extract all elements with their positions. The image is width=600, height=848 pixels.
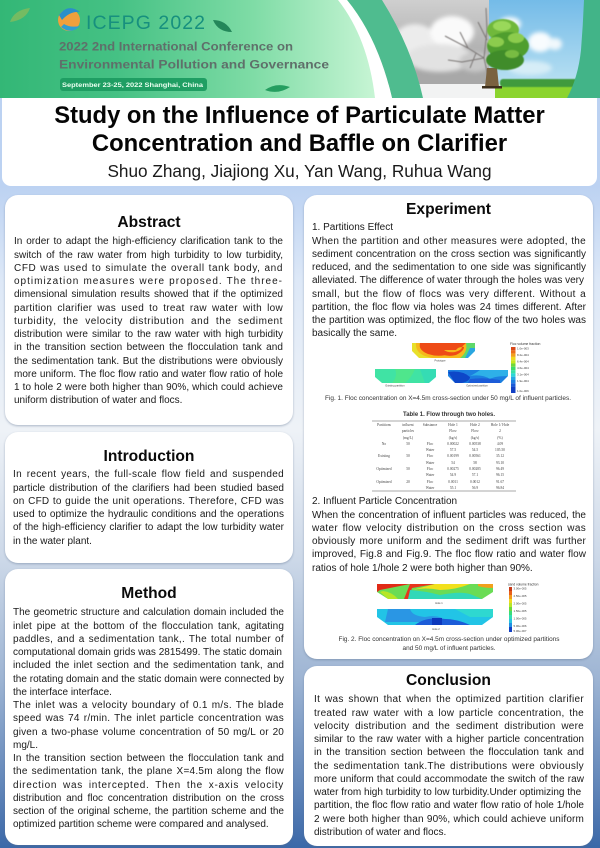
panel: method [5,569,293,845]
conference full title line 2: Environmental Pollution and Governance [59,58,329,72]
panel: conclusion [304,666,593,846]
text: method body [13,607,284,830]
contour labels: Hole 2 [432,627,440,631]
text: method body: included the inlet section and the sedimentation tank, and [13,660,284,671]
text: abstract body: turbidity, the velocity distribution and the sediment [14,316,283,327]
table 1 title: Table 1. Flow through two holes. [403,411,495,418]
table 1: 54.9 [450,473,456,477]
text: conclusion body: 2 were both higher than 90%, which could achieve uniform [314,814,584,825]
arc bands [338,0,600,98]
table 1: Floc [427,480,434,484]
text: method body: In the transition section between the flocculation tank and [13,753,284,764]
banner background [0,0,600,98]
text: method body: computational domain grids was 2815499. The static domain [13,647,282,658]
authors: Shuo Zhang, Jiajiong Xu, Yan Wang, Ruhua Wang [107,161,492,181]
table 1: Existing [378,454,390,458]
table 1: Hole 1/ Hole [491,423,510,427]
figure 1: floc concentration contours [375,342,540,393]
table 1: 55.1 [450,486,456,490]
text: introduction body: in the water plant. [13,536,92,547]
text: conclusion body: similar to the raw water with a higher particle concentration [314,734,584,745]
text: abstract body: In order to adapt the high-efficiency clarification tank to the [14,236,283,247]
colour legend [510,342,540,393]
text: influent particle concentration: When the concentration of influent particles was reduced, the [312,510,586,521]
text: conclusion body: water from high turbidity to low turbidity.Under optimizing the [314,787,581,798]
conference logo [58,8,80,31]
colour legend: 3.00e-005 [514,586,527,590]
text: abstract body: in the transition section between the flocculation tank and [14,342,283,353]
text: partitions effect: When the partition and other measures were adopted, the [312,236,586,247]
date pill [60,78,207,91]
contour labels: Prototype [434,358,446,362]
table 1: (kg/s) [471,436,480,440]
table 1: 35.12 [496,454,504,458]
text: conclusion body: It was shown that when the optimized partition clarifier [314,694,584,705]
contour labels: Optimized partition [466,384,488,388]
text: partitions effect: alleviated. The difference of water through the holes was very [312,275,584,286]
table 1: particles [402,429,415,433]
colour legend: Floc volume fraction [510,342,540,346]
table 1: 0.0011 [448,480,458,484]
colour legend: 1.0e-006 [517,389,529,393]
text: abstract body: CFD was used to simulate the overall tank body, and [14,263,283,274]
title: Study on the Influence of Particulate Matter [54,102,545,129]
text: partitions effect [312,222,586,339]
table 1: 4.09 [497,442,503,446]
table 1: 96.84 [496,486,504,490]
contour: existing partition [375,369,436,383]
text: method body: The inlet was a velocity boundary of 0.1 m/s. The blade [13,700,284,711]
table 1: Hole 2 [470,423,480,427]
text: partitions effect: sediment concentration on the cross section was significantly [312,249,586,260]
heading: abstract: Abstract [117,214,181,231]
text: abstract body: uniform distribution of water and flocs. [14,395,182,406]
table 1: 57.5 [450,448,456,452]
text: influent particle concentration: improved, Fig.8 and Fig.9. The floc flow ratio and water flow [312,549,586,560]
text: partitions effect: basically the same. [312,328,397,339]
table 1: Hole 1 [448,423,458,427]
text: influent particle concentration: water flow velocity distribution on the cross section was [312,523,586,534]
table 1: 56.9 [472,486,478,490]
text: introduction body: of the high-efficiency clarifier to adapt the low turbidity water [13,522,284,533]
table 1: 54.5 [472,448,478,452]
text: conclusion body: in the transition section between the flocculation tank and [314,747,584,758]
table 1: 50 [406,442,410,446]
text: conclusion body [314,694,584,838]
header banner [0,0,600,98]
icon: leaves [10,8,290,92]
text: introduction body: on CFD to guide the unit operations. Therefore, CFD was [13,496,284,507]
photo: clouds and sky [375,0,600,98]
text: influent particle concentration: ratios of hole 1/hole 2 were both higher than 90%. [312,563,533,574]
table 1: Water [426,473,435,477]
text: abstract body: dimensional simulation results showed that if the optimized [14,289,283,300]
caption: figure 2 [338,636,560,652]
text: method body: the rotating domain and the static domain were connected by [13,674,284,685]
text: abstract body: more uniform. The floc flow ratio and water flow ratio of hole [14,369,283,380]
colour legend: sand volume fraction [508,582,539,586]
table 1: 0.0012 [470,480,480,484]
colour legend: 2.50e-005 [514,594,527,598]
table 1: 96.49 [496,467,504,471]
text: introduction body: In recent years, the full-scale flow field and suspended [13,469,284,480]
table 1: 0.00022 [447,442,459,446]
table 1: (%) [497,436,503,440]
table 1: Partitions [377,423,391,427]
text: conclusion body: the sedimentation tank.The distributions were obviously [314,761,584,772]
heading: experiment: Experiment [406,201,491,218]
text: introduction body: used to optimize the hydraulic conditions and the operations [13,509,284,520]
table 1: Optimized [376,480,392,484]
panel: abstract [5,195,293,425]
text: influent particle concentration: 2. Influent Particle Concentration [312,496,457,507]
text: abstract body: 1 to hole 2 were both higher than 90%, which could achieve [14,382,283,393]
text: method body: the sedimentation tank, the plane X=4.5m along the flow [13,766,284,777]
colour legend [508,582,539,633]
colour legend: 5.00e-006 [514,624,527,628]
colour legend: 6.4e-004 [517,360,529,364]
table 1: Water [426,448,435,452]
heading: conclusion: Conclusion [406,672,491,689]
table 1: 57.1 [472,473,478,477]
table 1: Water [426,461,435,465]
contour: hole 1 [377,584,493,599]
colour legend: 1.50e-005 [514,609,527,613]
text: abstract body [14,236,283,406]
table 1: Floc [427,454,434,458]
table 1: Optimized [376,467,392,471]
table 1: Floc [427,442,434,446]
text: influent particle concentration: obviously more uniform and the sediment drift was further [312,536,586,547]
text: partitions effect: reduced, and the sedimentation to one side was significantly [312,262,586,273]
date pill: September 23-25, 2022 Shanghai, China [62,82,203,89]
contour labels [385,358,488,388]
table 1: 2 [499,429,501,433]
text: method body: direction was intercepted. Then the x-axis velocity [13,780,284,791]
colour legend: 3.1e-004 [517,372,529,376]
colour legend: 1.0e-003 [517,346,529,350]
table 1: 58 [473,461,477,465]
text: method body: distribution and floc concentration distribution on the cross [13,793,284,804]
text: partitions effect: 1. Partitions Effect [312,222,393,233]
text: method body: paddles, and a sedimentation tank,. The total number of [13,634,284,645]
text: abstract body: the sedimentation tank. But the distributions were obviously [14,356,283,367]
heading: method: Method [121,585,177,602]
table 1: 20 [406,480,410,484]
table 1: Floc [427,467,434,471]
text: method body: the interface interface. [13,687,112,698]
text: method body: The geometric structure and calculation domain included the [13,607,284,618]
table 1: Water [426,486,435,490]
table 1: 54 [451,461,455,465]
text: introduction body: particle distribution of the clarifiers had been studied based [13,483,284,494]
table 1: 0.00538 [469,442,481,446]
table 1: 91.67 [496,480,504,484]
text: abstract body: optimization measures were proposed. The three- [14,276,283,287]
text: influent particle concentration [312,496,586,574]
panel: experiment [304,195,593,659]
conference name: ICEPG 2022 [86,12,205,34]
text: conclusion body: more uniform that could accommodate the switch of the raw [314,774,584,785]
colour legend: 4.6e-004 [517,366,529,370]
title [54,102,545,157]
text: partitions effect: small, but the flow of flocs was very different. Without a [312,289,586,300]
table 1: Flow [471,429,479,433]
text: conclusion body: partition, the floc flow ratio and water flow ratio of hole 1/hole [314,800,584,811]
colour legend: 5.00e-007 [514,629,527,633]
caption: figure 1: Fig. 1. Floc concentration on X=4.5m cross-section under 50 mg/L of influent particles. [325,395,571,402]
text: partitions effect: partition, the floc flow via holes was 24 times different. After [312,302,586,313]
text: partitions effect: the partition was optimized, the floc flow of the two holes was [312,315,586,326]
title band [2,98,597,186]
text: abstract body: partition clarifier was used to treat raw water with low [14,303,283,314]
table 1: 0.00285 [469,467,481,471]
text: method body: given a two-phase volume concentration of 50 mg/L or 20 [13,727,284,738]
colour legend: 1.9e-004 [517,379,529,383]
caption: figure 2: Fig. 2. Floc concentration on X=4.5m cross-section under optimized partitions [338,636,560,643]
text: conclusion body: treated raw water with a low particle concentration, the [314,708,584,719]
text: method body: mg/L. [13,740,38,751]
text: method body: optimized partition scheme were compared and analysed. [13,819,269,830]
table 1: 96.15 [496,473,504,477]
contour: hole 2 [377,609,493,625]
text: abstract body: distribution were similar to the raw water with high turbidity [14,329,283,340]
caption: figure 2: and 50 mg/L of influent particles. [402,645,496,652]
table 1 [372,421,516,491]
heading: introduction: Introduction [104,448,194,465]
table 1: influent [402,423,414,427]
text: conclusion body: velocity distribution and the sediment distribution were [314,721,584,732]
colour legend: 1.00e-005 [514,616,527,620]
text: conclusion body: distribution of water and flocs. [314,827,446,838]
table 1: 93.10 [496,461,504,465]
table 1: 50 [406,467,410,471]
table 1: 105.50 [495,448,505,452]
text: method body: inlet pipe at the bottom of the flocculation tank, agitating [13,621,284,632]
table 1: Substance [423,423,438,427]
title: Concentration and Baffle on Clarifier [92,130,507,157]
contour: no partition [412,343,475,358]
contour labels: Hole 1 [435,601,443,605]
figure 2: floc concentration contours [377,582,539,633]
contour: optimized partition [448,370,508,383]
table 1: 0.00199 [447,454,459,458]
table 1: 0.00561 [469,454,481,458]
text: introduction body [13,469,284,547]
table 1: 50 [406,454,410,458]
table 1: Flow [449,429,457,433]
table 1: (kg/s) [449,436,458,440]
contour labels: Existing partition [385,384,405,388]
panel: introduction [5,432,293,563]
colour legend: 2.00e-005 [514,602,527,606]
table 1: (mg/L) [403,436,414,440]
contour labels [432,601,443,631]
conference full title line 1: 2022 2nd International Conference on [59,40,293,54]
text: method body: speed was 74 r/min. The inlet particle concentration was [13,713,284,724]
table 1: 0.00275 [447,467,459,471]
text: abstract body: switch of the raw water from high turbidity to low turbidity, [14,250,283,261]
icon: half dead half living tree [445,8,580,98]
colour legend: 8.2e-004 [517,353,529,357]
text: method body: section of the original scheme, the partition scheme and the [13,806,284,817]
figures and table [325,342,571,652]
table 1: No [382,442,386,446]
